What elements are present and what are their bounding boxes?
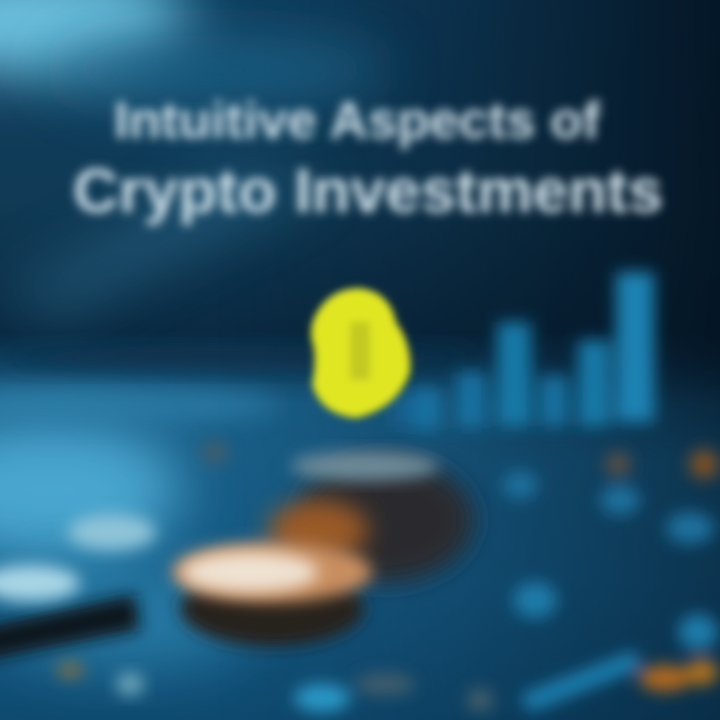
bar chart <box>390 272 654 430</box>
title: Intuitive Aspects of <box>114 92 601 150</box>
scattered dots: lower right <box>56 440 719 712</box>
light patches: left <box>0 514 156 696</box>
title: Crypto Investments <box>73 157 663 226</box>
title <box>73 92 663 226</box>
icon: yellow bitcoin coin <box>311 288 410 418</box>
stacked coins: centre <box>172 451 473 646</box>
dark bar: lower left <box>0 594 140 662</box>
